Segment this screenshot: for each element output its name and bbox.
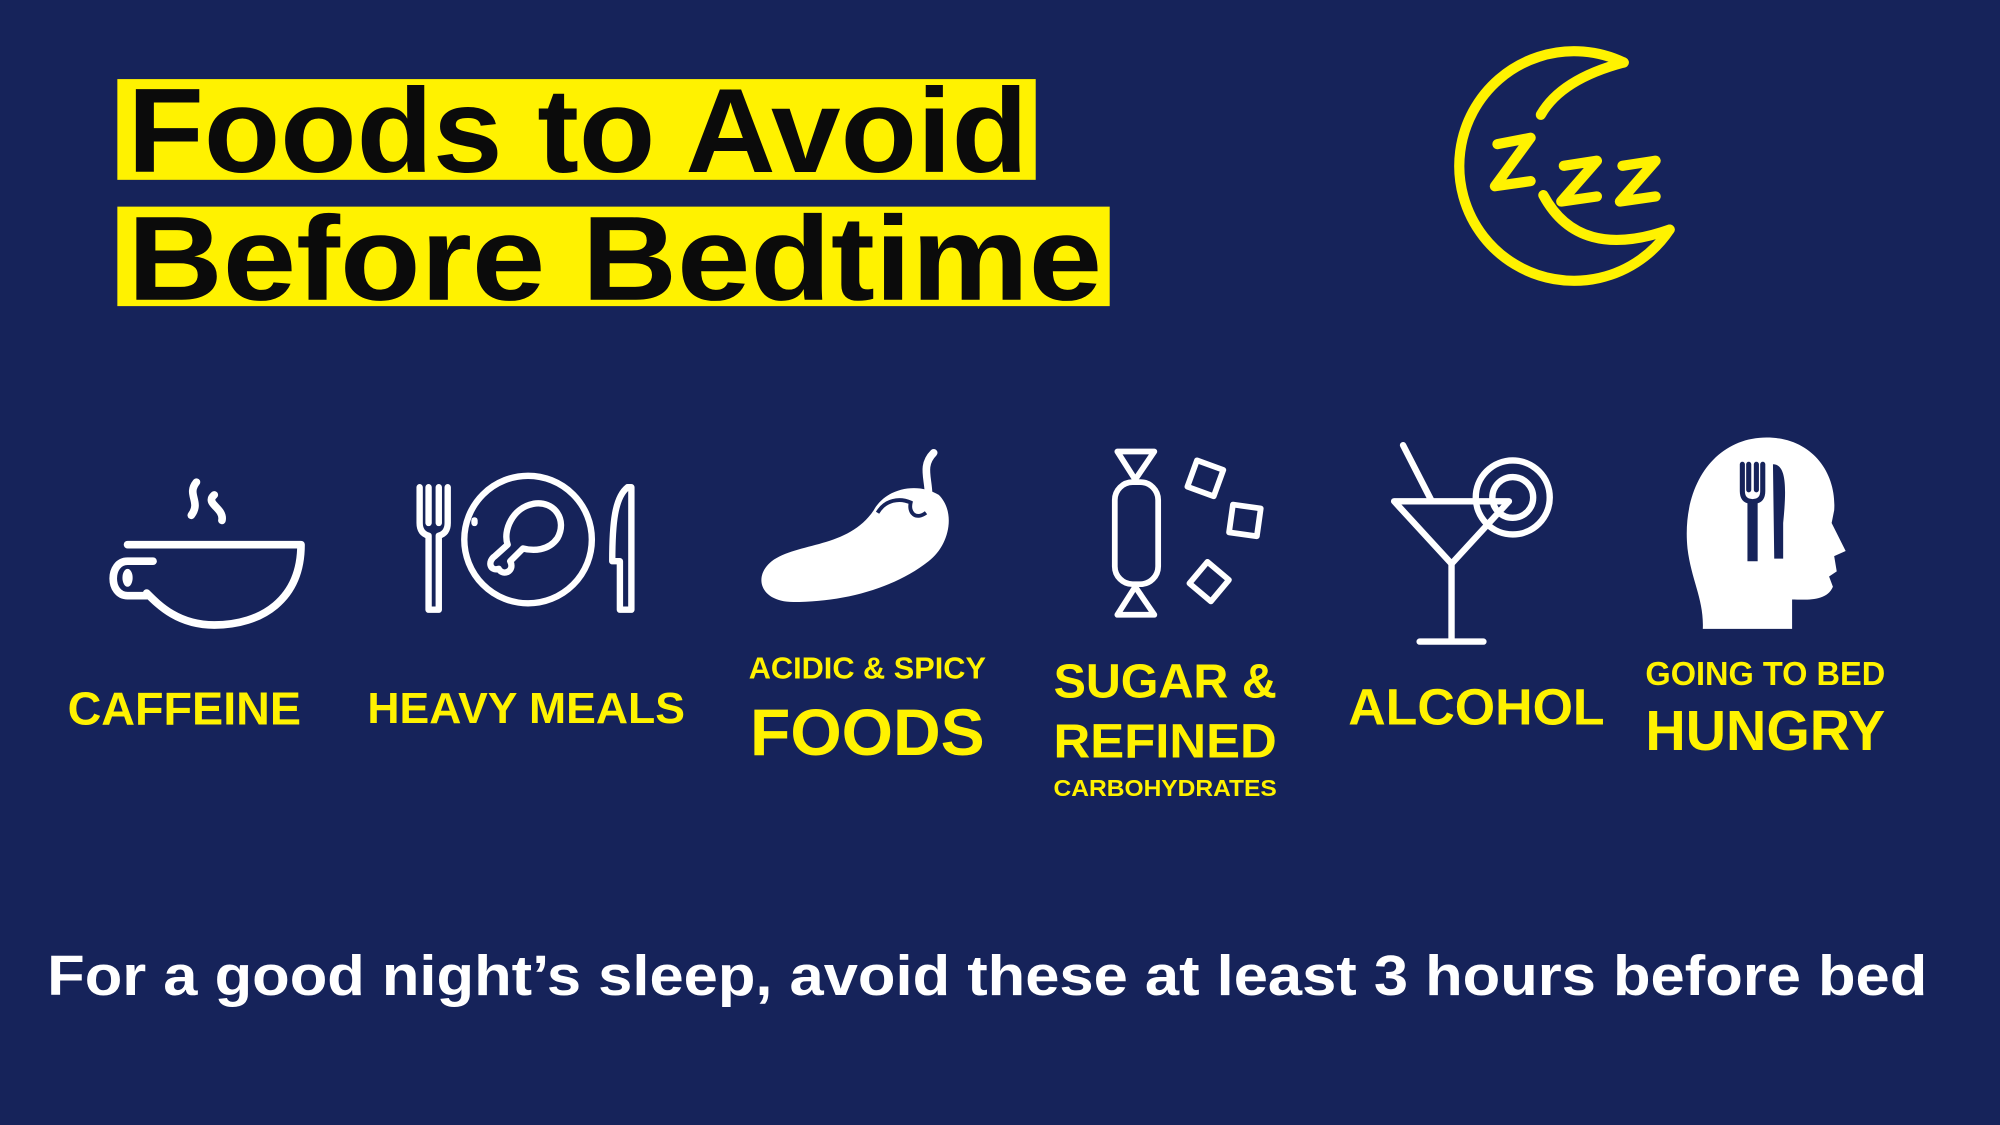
- icon: cocktail glass: [1394, 445, 1550, 642]
- icon: candy and sugar cubes: [1115, 452, 1261, 615]
- label: going to bed hungry: [1645, 656, 1885, 762]
- item: caffeine: [68, 482, 301, 734]
- label: acidic & spicy foods: FOODS: [750, 696, 985, 770]
- label: sugar & refined: SUGAR &: [1054, 655, 1277, 709]
- label: alcohol: ALCOHOL: [1348, 678, 1605, 735]
- label: sugar & refined: CARBOHYDRATES: [1054, 775, 1277, 801]
- label: sugar & refined: REFINED: [1054, 715, 1277, 769]
- label: acidic & spicy foods: ACIDIC & SPICY: [749, 652, 986, 686]
- item: sugar & refined carbohydrates: [1054, 452, 1277, 801]
- title: Before Bedtime: [128, 192, 1102, 326]
- label: acidic & spicy foods: [749, 652, 986, 770]
- label: caffeine: CAFFEINE: [68, 682, 301, 734]
- label: sugar & refined: [1054, 655, 1277, 801]
- icon: moon with zzz: [1459, 51, 1670, 281]
- item: acidic & spicy foods: [749, 453, 986, 770]
- icon: chili pepper: [761, 453, 949, 602]
- icon: head with fork and knife: [1687, 438, 1846, 629]
- label: heavy meals: HEAVY MEALS: [367, 685, 685, 733]
- item: going to bed hungry: [1645, 438, 1885, 762]
- footer text: For a good night’s sleep, avoid these at least 3 hours before bed: [47, 944, 1927, 1007]
- item: alcohol: [1348, 445, 1605, 735]
- icon: coffee cup: [113, 482, 301, 625]
- label: going to bed hungry: GOING TO BED: [1645, 656, 1885, 693]
- icon: plate with fork and knife: [420, 476, 631, 610]
- title: [117, 64, 1110, 326]
- title: Foods to Avoid: [128, 64, 1028, 198]
- label: going to bed hungry: HUNGRY: [1645, 699, 1885, 762]
- item: heavy meals: [367, 476, 685, 733]
